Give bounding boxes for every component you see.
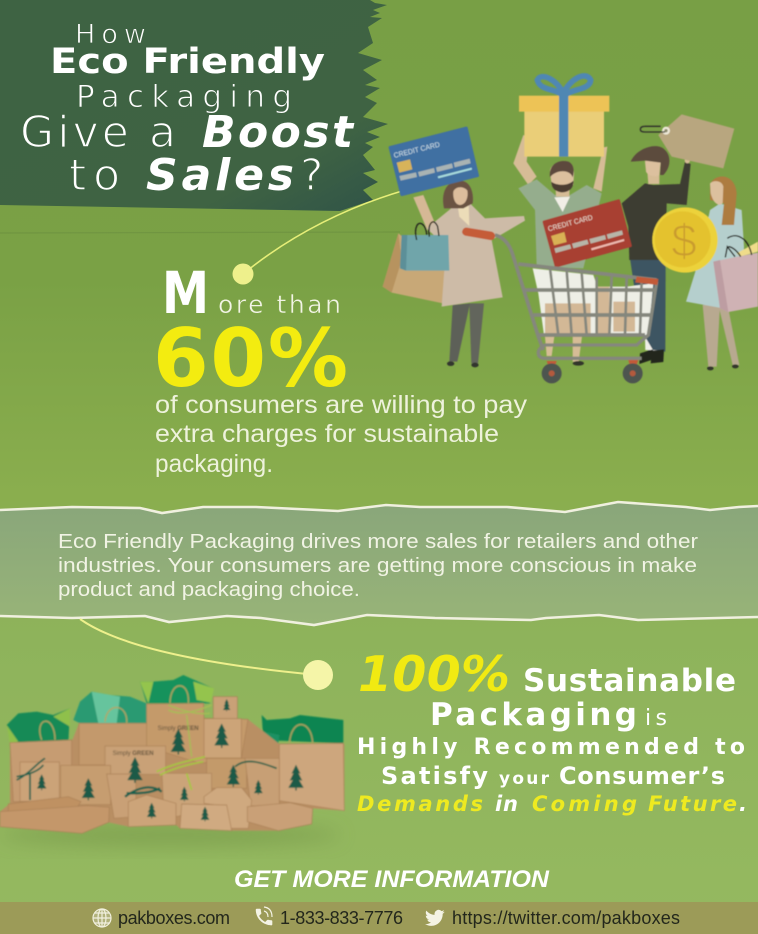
person: man with gift xyxy=(513,135,607,366)
panel: footer contact bar xyxy=(0,902,758,934)
text: consumers statement xyxy=(155,391,528,478)
icon: twitter bird xyxy=(425,910,445,926)
text: is: is xyxy=(645,706,667,731)
title xyxy=(20,19,355,201)
text: satisfy your consumer's xyxy=(381,762,725,790)
title line: Packaging: Packaging xyxy=(76,79,292,115)
ribbons xyxy=(17,686,313,800)
brand labels xyxy=(113,726,199,757)
title line: Give a Boost: Give a xyxy=(20,107,176,158)
title mark: question: ? xyxy=(300,150,323,201)
heading: Packaging: Packaging xyxy=(430,697,637,733)
icon: globe xyxy=(93,909,111,927)
text: demands in coming future xyxy=(357,792,747,816)
band text: industries. Your consumers are getting more conscious in make xyxy=(58,555,697,577)
drop cap M: M xyxy=(162,259,209,327)
text: ore than: ore than xyxy=(218,290,341,319)
text: website: pakboxes.com xyxy=(118,908,230,928)
panel: torn title banner xyxy=(0,0,388,211)
title word: to: to xyxy=(69,150,120,201)
icon: gold dollar coin xyxy=(652,207,718,273)
heading: Sustainable: Sustainable xyxy=(523,663,736,699)
text: consumers statement: extra charges for sustainable xyxy=(155,420,499,448)
text: demands in coming future: . xyxy=(739,792,747,816)
text: twitter url: https://twitter.com/pakboxes xyxy=(452,908,680,928)
band text: Eco Friendly Packaging drives more sales for retailers and other xyxy=(58,531,698,553)
stat: 100%: 100% xyxy=(358,646,510,703)
shadow under products xyxy=(0,823,340,847)
text: demands in coming future: Demands xyxy=(357,792,483,816)
text: demands in coming future: Coming xyxy=(532,792,637,816)
person: woman with card xyxy=(383,181,525,367)
band text: product and packaging choice. xyxy=(58,579,360,601)
call to action heading: GET MORE INFORMATION xyxy=(234,866,550,893)
text: consumers statement: of consumers are willing to pay xyxy=(155,391,528,419)
text: highly recommended: Highly Recommended to xyxy=(357,735,745,760)
illustration: shoppers xyxy=(383,76,758,383)
icon: blue credit card: CREDIT CARD xyxy=(393,140,441,160)
title line: How: How xyxy=(75,19,146,50)
icon: gift box xyxy=(519,76,609,157)
person: woman in black with tag xyxy=(622,146,691,364)
connector dot xyxy=(303,660,333,690)
tree logos xyxy=(37,699,304,821)
shopping cart xyxy=(462,228,658,383)
panel: torn paper band xyxy=(0,502,758,625)
tissue paper xyxy=(7,675,343,758)
text: satisfy your consumer's: Consumer’s xyxy=(559,762,725,790)
title line: Eco Friendly: Eco Friendly xyxy=(50,42,325,82)
icon: price tag xyxy=(640,114,734,168)
band text xyxy=(58,531,698,601)
connector line: band to dot xyxy=(80,619,318,675)
text block: 100 percent sustainable xyxy=(357,646,747,816)
text: demands in coming future: Future xyxy=(648,792,737,816)
text: satisfy your consumer's: your xyxy=(499,769,550,789)
icon: red credit card xyxy=(543,199,632,267)
connector line: card to dot xyxy=(243,191,402,274)
illustration: kraft packaging set xyxy=(0,675,344,833)
text: satisfy your consumer's: Satisfy xyxy=(381,762,488,790)
big stat: 60%: 60% xyxy=(153,312,348,405)
brand labels: Simply GREEN xyxy=(113,751,154,757)
text block: more than 60 percent xyxy=(153,259,528,478)
icon: red credit card: CREDIT CARD xyxy=(547,213,594,233)
icon: gold dollar coin: $ xyxy=(671,215,697,267)
text: demands in coming future: in xyxy=(495,792,518,816)
kraft backing xyxy=(0,704,344,833)
kraft bags and boxes xyxy=(0,697,344,833)
icon: phone xyxy=(256,907,272,925)
connector dot xyxy=(232,264,254,284)
person: woman in blue dress xyxy=(686,177,758,370)
title word: Boost: Boost xyxy=(202,107,355,158)
text: phone number: 1-833-833-7776 xyxy=(280,908,403,928)
text: consumers statement: packaging. xyxy=(155,450,273,478)
icon: blue credit card xyxy=(389,127,479,196)
title word: Sales: Sales xyxy=(146,150,294,201)
brand labels: Simply GREEN xyxy=(158,726,199,732)
